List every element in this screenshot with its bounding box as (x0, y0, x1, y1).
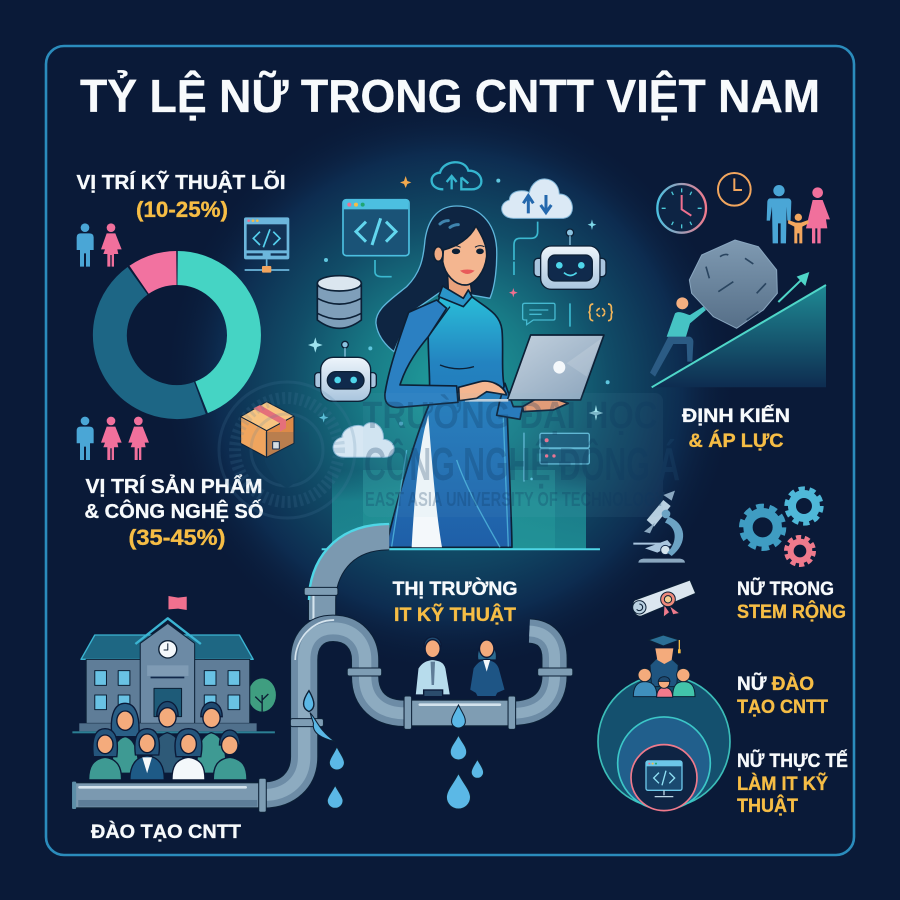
skirt fold lines (392, 417, 508, 547)
heading: product and digital roles (84, 475, 264, 550)
label: women trained in IT: NỮ ĐÀO (737, 673, 814, 695)
flag (168, 596, 187, 610)
label: women actually in technical IT: LÀM IT KỸ (737, 773, 828, 795)
student front 4 (213, 730, 247, 780)
laptop (465, 335, 604, 400)
heading: product and digital roles: (35-45%) (128, 525, 226, 550)
label: bias and pressure (682, 405, 790, 452)
label: women in broad STEM: STEM RỘNG (737, 601, 846, 623)
icon: right robot (534, 229, 606, 289)
panel: central woman with tech icons (308, 162, 613, 549)
bodice seam lines (428, 307, 474, 369)
student front 1 (89, 729, 122, 780)
school gable roof (135, 618, 201, 644)
icon: chat bubble (523, 303, 555, 325)
collar (439, 286, 472, 307)
students group (89, 701, 247, 780)
label: women actually in technical IT: NỮ THỰC TẾ (737, 750, 848, 772)
icon: wall clock (657, 184, 706, 233)
boulder (689, 240, 777, 328)
panel: STEM funnel (598, 489, 848, 817)
label: market IT (392, 578, 518, 626)
right sleeve (497, 383, 523, 419)
label: market IT: THỊ TRƯỜNG (392, 578, 518, 600)
pipe: bottom straight section (72, 778, 266, 812)
school door and sign (147, 665, 188, 717)
icon: microscope (633, 491, 685, 563)
pipe: top connector (309, 524, 389, 620)
icon: family (767, 185, 830, 243)
watermark text: TRƯỜNG ĐẠI HỌC (362, 393, 658, 437)
watermark (219, 382, 680, 518)
heading: core technical roles: (10-25%) (136, 197, 228, 222)
platform line (322, 546, 600, 552)
icon: gears (743, 489, 821, 564)
watermark seal (219, 382, 355, 518)
school windows (95, 671, 240, 710)
label: women in broad STEM: NỮ TRONG (737, 578, 834, 600)
school building (72, 596, 276, 733)
student back centre (151, 701, 184, 773)
market workers (415, 637, 505, 697)
ear (434, 247, 443, 261)
watermark text: CÔNG NGHỆ ĐÔNG Á (364, 438, 680, 490)
left sleeve (385, 300, 458, 407)
pipe: right bend (511, 631, 555, 713)
connector lines (375, 222, 570, 327)
icon: graduate with students (633, 635, 695, 697)
decorative sparkles (308, 176, 610, 480)
segment: pink (139, 268, 176, 280)
heading: product and digital roles: VỊ TRÍ SẢN PHẨM (86, 475, 262, 498)
icon: code monitor (646, 761, 682, 797)
label: bias and pressure: & ÁP LỰC (688, 430, 784, 452)
label: women trained in IT (737, 673, 828, 718)
icon: man and two women (77, 417, 149, 460)
watermark panel (363, 393, 663, 517)
inner circle: actual IT (631, 745, 697, 811)
heading: core technical roles: VỊ TRÍ KỸ THUẬT LÕI (76, 170, 286, 194)
icon: outline cloud upload (432, 162, 481, 189)
student back right (196, 702, 226, 773)
icon: database (317, 276, 361, 328)
person pushing boulder (650, 297, 706, 377)
middle circle: IT training (618, 717, 710, 810)
heading: core technical roles (76, 170, 286, 222)
label: women actually in technical IT (737, 750, 848, 817)
panel: pressure and bias (650, 173, 830, 452)
water drops (327, 705, 484, 809)
icon: left robot (315, 341, 376, 401)
panel: leaky pipeline (72, 524, 573, 812)
pipe: main run (264, 620, 405, 795)
icon: white cloud (333, 423, 394, 457)
teal columns behind the figure (332, 470, 586, 549)
leak at left pipe (304, 691, 335, 742)
label: women actually in technical IT: THUẬT (737, 795, 798, 817)
school wings (81, 635, 253, 659)
icon: code monitor with network (244, 217, 289, 273)
icon: solid cloud with arrows (502, 179, 572, 218)
face (443, 226, 487, 285)
icon: server panel (524, 433, 589, 482)
label: women in broad STEM (737, 578, 846, 623)
hair back (376, 206, 497, 352)
clock (159, 641, 177, 658)
icon: small clock (718, 173, 751, 206)
woman in ao dai (376, 206, 604, 547)
female worker (469, 640, 505, 697)
school base (72, 723, 275, 733)
segment: dark blue (110, 281, 200, 402)
lower hand (523, 383, 568, 412)
slope with arrow (652, 272, 826, 387)
pipe: middle straight section (404, 696, 516, 729)
icon: code window (343, 200, 409, 256)
watermark text (362, 393, 680, 511)
student back left (111, 703, 139, 773)
label: training: ĐÀO TẠO CNTT (91, 821, 241, 843)
donut chart (110, 268, 244, 402)
white panel of dress (412, 415, 442, 547)
icon: cardboard box (241, 402, 294, 457)
large circle: STEM (598, 676, 730, 808)
label: market IT: IT KỸ THUẬT (394, 604, 516, 626)
hair highlight (440, 221, 458, 227)
title: TỶ LỆ NỮ TRONG CNTT VIỆT NAM (80, 70, 820, 122)
dress (386, 292, 512, 547)
upper hand (459, 381, 507, 401)
panel: donut and job roles (76, 170, 294, 550)
icon: code brackets (588, 304, 613, 321)
student front 2 (130, 729, 164, 780)
segment: teal (178, 268, 244, 397)
label: bias and pressure: ĐỊNH KIẾN (682, 405, 790, 427)
heading: product and digital roles: & CÔNG NGHỆ SỐ (84, 499, 264, 523)
watermark text: EAST ASIA UNIVERSITY OF TECHNOLOGY (365, 489, 665, 511)
icon: man and woman (77, 223, 122, 267)
icon: diploma (633, 580, 696, 617)
school centre block (140, 623, 195, 723)
pipe flanges (290, 587, 573, 727)
tree (248, 678, 276, 712)
facial features (449, 246, 484, 274)
neck (447, 270, 472, 305)
student front 3 (172, 729, 205, 780)
male worker (415, 637, 451, 697)
label: women trained in IT: TẠO CNTT (737, 697, 828, 718)
